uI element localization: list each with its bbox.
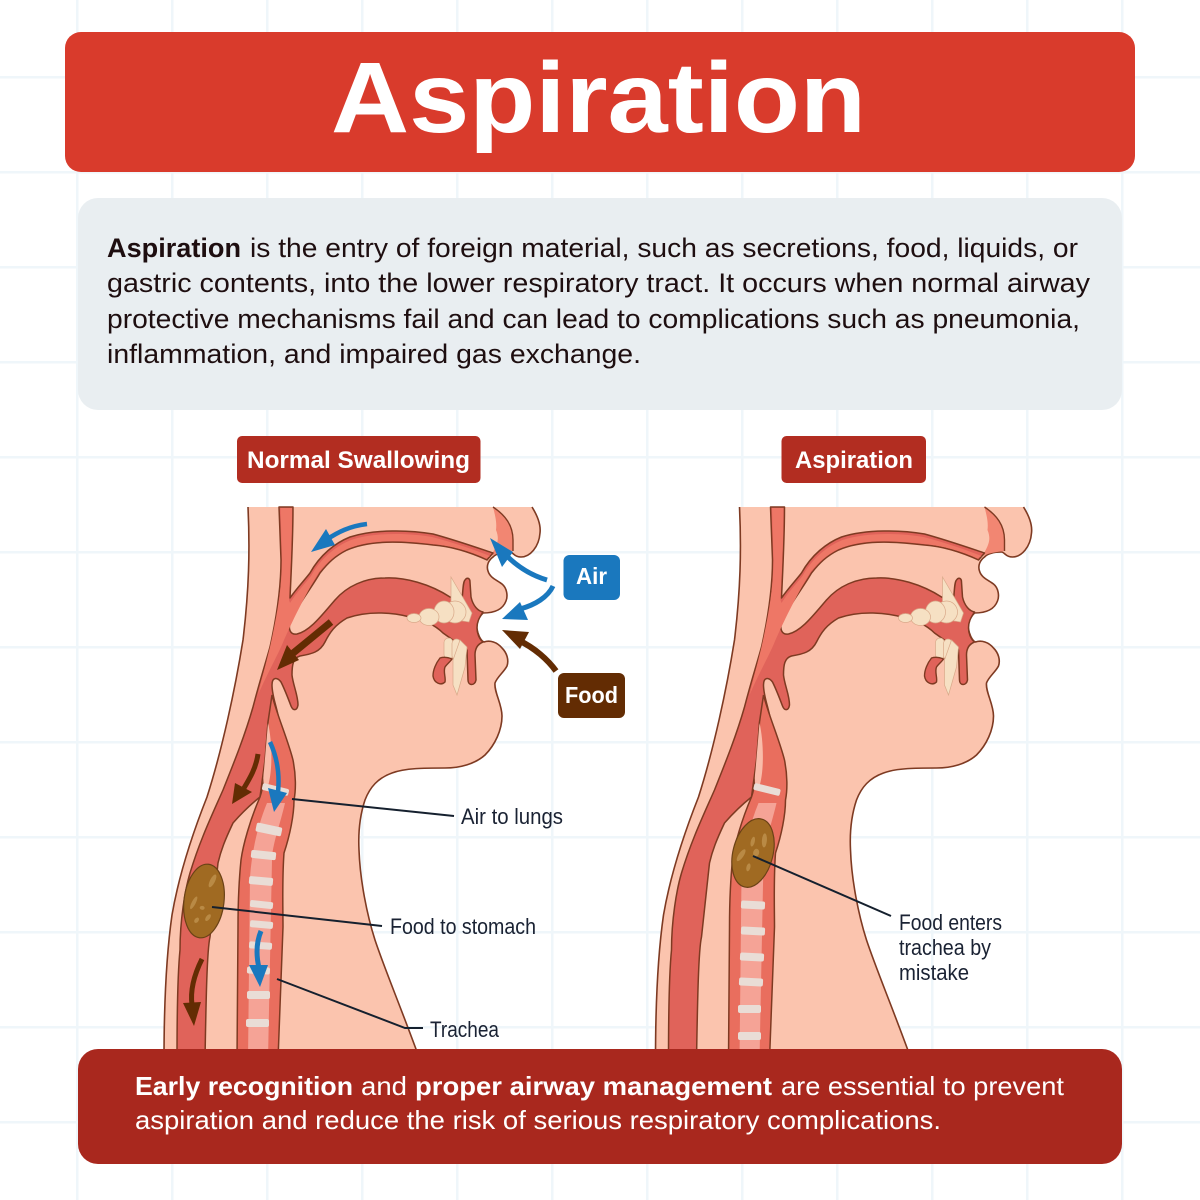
arrow: air down trachea	[249, 931, 268, 987]
callout: trachea: Trachea	[430, 1017, 499, 1042]
head and neck anatomy	[164, 507, 540, 1060]
arrow: air into mouth	[502, 586, 553, 620]
head and neck anatomy	[656, 507, 1032, 1060]
arrow: food through pharynx	[277, 622, 331, 670]
diagram: aspiration	[656, 507, 1032, 1060]
panel: definition	[78, 198, 1122, 410]
food bolus in trachea	[725, 814, 781, 892]
badge: air: Air	[576, 563, 607, 589]
definition text: inflammation, and impaired gas exchange.	[107, 339, 641, 369]
callout: air to lungs: Air to lungs	[461, 804, 563, 829]
definition text: Aspiration	[107, 233, 241, 263]
arrow: air through nasal cavity	[311, 524, 367, 552]
diagram: normal swallowing	[164, 507, 563, 1060]
heading: normal swallowing: Normal Swallowing	[247, 447, 470, 474]
definition text: protective mechanisms fail and can lead to complications such as pneumonia,	[107, 304, 1080, 334]
key message text: proper airway management	[415, 1071, 772, 1101]
tracheal rings	[246, 822, 283, 1027]
heading: aspiration	[782, 436, 926, 483]
callout: trachea	[277, 979, 499, 1042]
arrow: air into nose	[490, 538, 547, 580]
callout: food to stomach: Food to stomach	[390, 914, 536, 939]
panel: key message	[78, 1049, 1122, 1164]
callout: food enters trachea by mistake: Food enters	[899, 910, 1002, 935]
arrow: food down esophagus	[183, 959, 202, 1026]
food bolus	[180, 862, 228, 940]
callout: air to lungs	[292, 799, 563, 829]
callout: food to stomach	[212, 907, 536, 939]
definition text: is the entry of foreign material, such as secretions, food, liquids, or	[250, 233, 1078, 263]
badge: food: Food	[565, 682, 618, 708]
definition text	[107, 233, 1091, 369]
arrow: food into esophagus	[232, 754, 258, 804]
key message text: and	[361, 1071, 407, 1101]
arrow: air into trachea	[268, 742, 287, 812]
badge: air	[564, 555, 620, 600]
arrow: food into mouth	[502, 630, 556, 671]
key message text: Early recognition	[135, 1071, 353, 1101]
heading: aspiration: Aspiration	[795, 447, 913, 474]
callout: food enters trachea by mistake: mistake	[899, 960, 969, 985]
badge: food	[558, 673, 625, 718]
callout: food enters trachea by mistake	[753, 856, 1002, 985]
definition text: gastric contents, into the lower respiratory tract. It occurs when normal airway	[107, 268, 1091, 298]
key message text: are essential to prevent	[781, 1071, 1065, 1101]
title: Aspiration	[331, 42, 866, 154]
title banner	[65, 32, 1135, 172]
key message text: aspiration and reduce the risk of serious respiratory complications.	[135, 1105, 941, 1135]
callout: food enters trachea by mistake: trachea by	[899, 935, 992, 960]
heading: normal swallowing	[237, 436, 480, 483]
key message text	[135, 1071, 1065, 1135]
tracheal rings	[738, 900, 765, 1040]
